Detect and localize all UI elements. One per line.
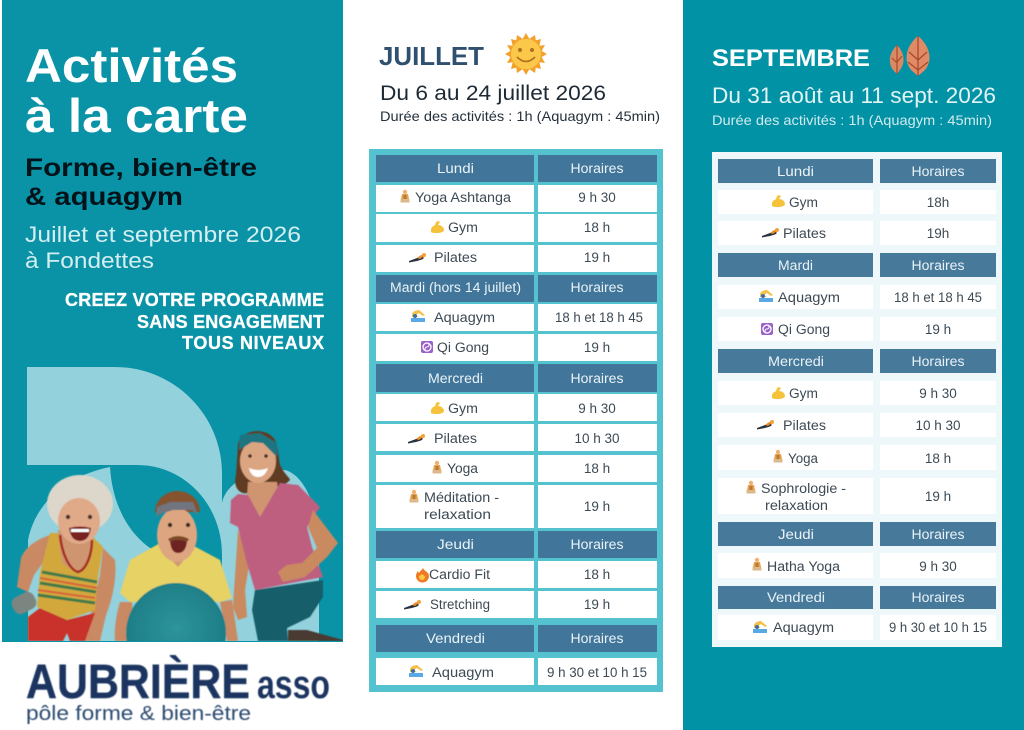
logo: Aubrière asso: pôle forme & bien-être — [26, 703, 251, 725]
subtitle: Forme, bien-être — [25, 154, 257, 182]
row: vendredi — [753, 590, 987, 635]
exercise ball — [126, 582, 226, 641]
row: mardi: Mardi — [778, 258, 813, 273]
subtitle — [25, 154, 257, 211]
row: mercredi: 19 h — [584, 499, 610, 514]
row: lundi: Horaires — [912, 164, 965, 179]
slogan — [65, 290, 324, 353]
row: mardi: 19 h — [584, 340, 610, 355]
row: lundi: Lundi — [777, 164, 814, 179]
panel: left teal column — [2, 0, 343, 642]
row: vendredi: Horaires — [912, 590, 965, 605]
row: lundi: Pilates — [434, 250, 477, 265]
row: lundi: 18h — [927, 195, 949, 210]
panel: juillet heading — [379, 33, 660, 124]
row: mercredi: Mercredi — [428, 371, 483, 386]
row: lundi — [762, 164, 965, 241]
logo: Aubrière asso — [26, 655, 330, 725]
row: jeudi: Hatha Yoga — [767, 559, 841, 574]
dates: Du 31 août au 11 sept. 2026 — [712, 83, 996, 108]
row: lundi: 18 h — [584, 220, 610, 235]
row: jeudi — [404, 537, 624, 612]
row: jeudi: 19 h — [584, 597, 610, 612]
row: mercredi: 9 h 30 — [578, 401, 616, 416]
row: mercredi: 10 h 30 — [915, 418, 961, 433]
row: vendredi: Vendredi — [767, 590, 825, 605]
row: lundi: 19h — [927, 226, 949, 241]
row: mardi: 18 h et 18 h 45 — [894, 290, 982, 305]
row: lundi: Pilates — [783, 226, 826, 241]
panel: septembre heading: SEPTEMBRE — [712, 45, 870, 72]
row: mercredi — [746, 354, 965, 513]
row: mercredi: Pilates — [434, 431, 477, 446]
logo: Aubrière asso: AUBRIÈRE — [26, 655, 250, 709]
row: mercredi: 18 h — [925, 451, 951, 466]
row: jeudi: Jeudi — [437, 537, 474, 552]
row: lundi: Lundi — [437, 161, 474, 176]
slogan: CREEZ VOTRE PROGRAMME — [65, 290, 324, 310]
slogan: SANS ENGAGEMENT — [137, 312, 324, 332]
row: vendredi — [409, 631, 647, 680]
icon: autumn leaves — [890, 36, 929, 76]
row: lundi: Horaires — [570, 161, 624, 176]
row: mardi — [759, 258, 982, 337]
row: vendredi: Aquagym — [773, 620, 834, 635]
person: senior woman with dumbbell — [9, 475, 115, 641]
panel: septembre heading — [712, 36, 996, 128]
row: mardi: Horaires — [570, 280, 624, 295]
slogan: TOUS NIVEAUX — [182, 333, 324, 353]
row: mercredi: Pilates — [783, 418, 826, 433]
row: mercredi: 9 h 30 — [919, 386, 957, 401]
dates and place: Juillet et septembre 2026 — [25, 222, 301, 247]
row: jeudi: 9 h 30 — [919, 559, 957, 574]
panel: juillet heading: JUILLET — [379, 41, 484, 71]
duration note: Durée des activités : 1h (Aquagym : 45min) — [712, 112, 992, 128]
row: jeudi — [752, 527, 965, 574]
decorative pale shape and photo of three people — [11, 367, 343, 641]
row: mardi: 18 h et 18 h 45 — [555, 310, 643, 325]
row: lundi: 19 h — [584, 250, 610, 265]
row: lundi — [400, 161, 624, 265]
person: man with exercise ball — [115, 491, 238, 641]
row: jeudi: Jeudi — [778, 527, 814, 542]
row: mercredi — [408, 371, 624, 522]
row: vendredi: 9 h 30 et 10 h 15 — [889, 620, 987, 635]
dates and place — [25, 222, 301, 273]
row: vendredi: Aquagym — [432, 665, 494, 680]
row: jeudi: Horaires — [570, 537, 624, 552]
main title: Activités — [25, 39, 238, 92]
table: juillet schedule — [369, 149, 663, 692]
row: jeudi: 18 h — [584, 567, 610, 582]
panel: right teal column — [683, 0, 1024, 730]
row: mardi: Qi Gong — [778, 322, 830, 337]
row: lundi: 9 h 30 — [578, 190, 616, 205]
main title — [25, 39, 248, 142]
row: jeudi: Stretching — [430, 597, 490, 612]
row: mercredi: Méditation - — [424, 490, 499, 505]
row: lundi: Gym — [789, 195, 818, 210]
row: mercredi: relaxation — [765, 498, 828, 513]
row: jeudi: Cardio Fit — [429, 567, 490, 582]
row: mardi: 19 h — [925, 322, 951, 337]
dates and place: à Fondettes — [25, 248, 154, 273]
row: mercredi: Gym — [789, 386, 818, 401]
dates: Du 6 au 24 juillet 2026 — [380, 82, 606, 105]
person: woman with headband — [230, 431, 343, 641]
row: mercredi: Horaires — [912, 354, 965, 369]
row: mercredi: 10 h 30 — [574, 431, 620, 446]
row: mercredi: Mercredi — [768, 354, 824, 369]
main title: à la carte — [25, 89, 248, 142]
row: mercredi: Horaires — [570, 371, 624, 386]
row: lundi: Yoga Ashtanga — [415, 190, 512, 205]
table: septembre schedule — [712, 152, 1002, 647]
subtitle: & aquagym — [25, 183, 183, 211]
row: mercredi: Sophrologie - — [761, 481, 846, 496]
row: vendredi: 9 h 30 et 10 h 15 — [547, 665, 647, 680]
row: mardi: Aquagym — [778, 290, 840, 305]
row: mercredi: 18 h — [584, 461, 610, 476]
row: mercredi: Yoga — [447, 461, 478, 476]
row: mercredi: relaxation — [424, 507, 491, 522]
row: jeudi: Horaires — [912, 527, 965, 542]
row: vendredi: Horaires — [570, 631, 624, 646]
logo: Aubrière asso: asso — [257, 663, 330, 707]
row: mardi — [390, 280, 643, 355]
row: vendredi: Vendredi — [426, 631, 485, 646]
row: mardi: Qi Gong — [437, 340, 489, 355]
row: mercredi: 19 h — [925, 489, 951, 504]
row: mercredi: Gym — [448, 401, 478, 416]
row: mardi: Aquagym — [434, 310, 495, 325]
duration note: Durée des activités : 1h (Aquagym : 45min) — [380, 108, 660, 124]
row: lundi: Gym — [448, 220, 478, 235]
row: mardi: Horaires — [912, 258, 965, 273]
icon: sun — [505, 33, 547, 75]
row: mercredi: Yoga — [788, 451, 818, 466]
row: mardi: Mardi (hors 14 juillet) — [390, 280, 521, 295]
